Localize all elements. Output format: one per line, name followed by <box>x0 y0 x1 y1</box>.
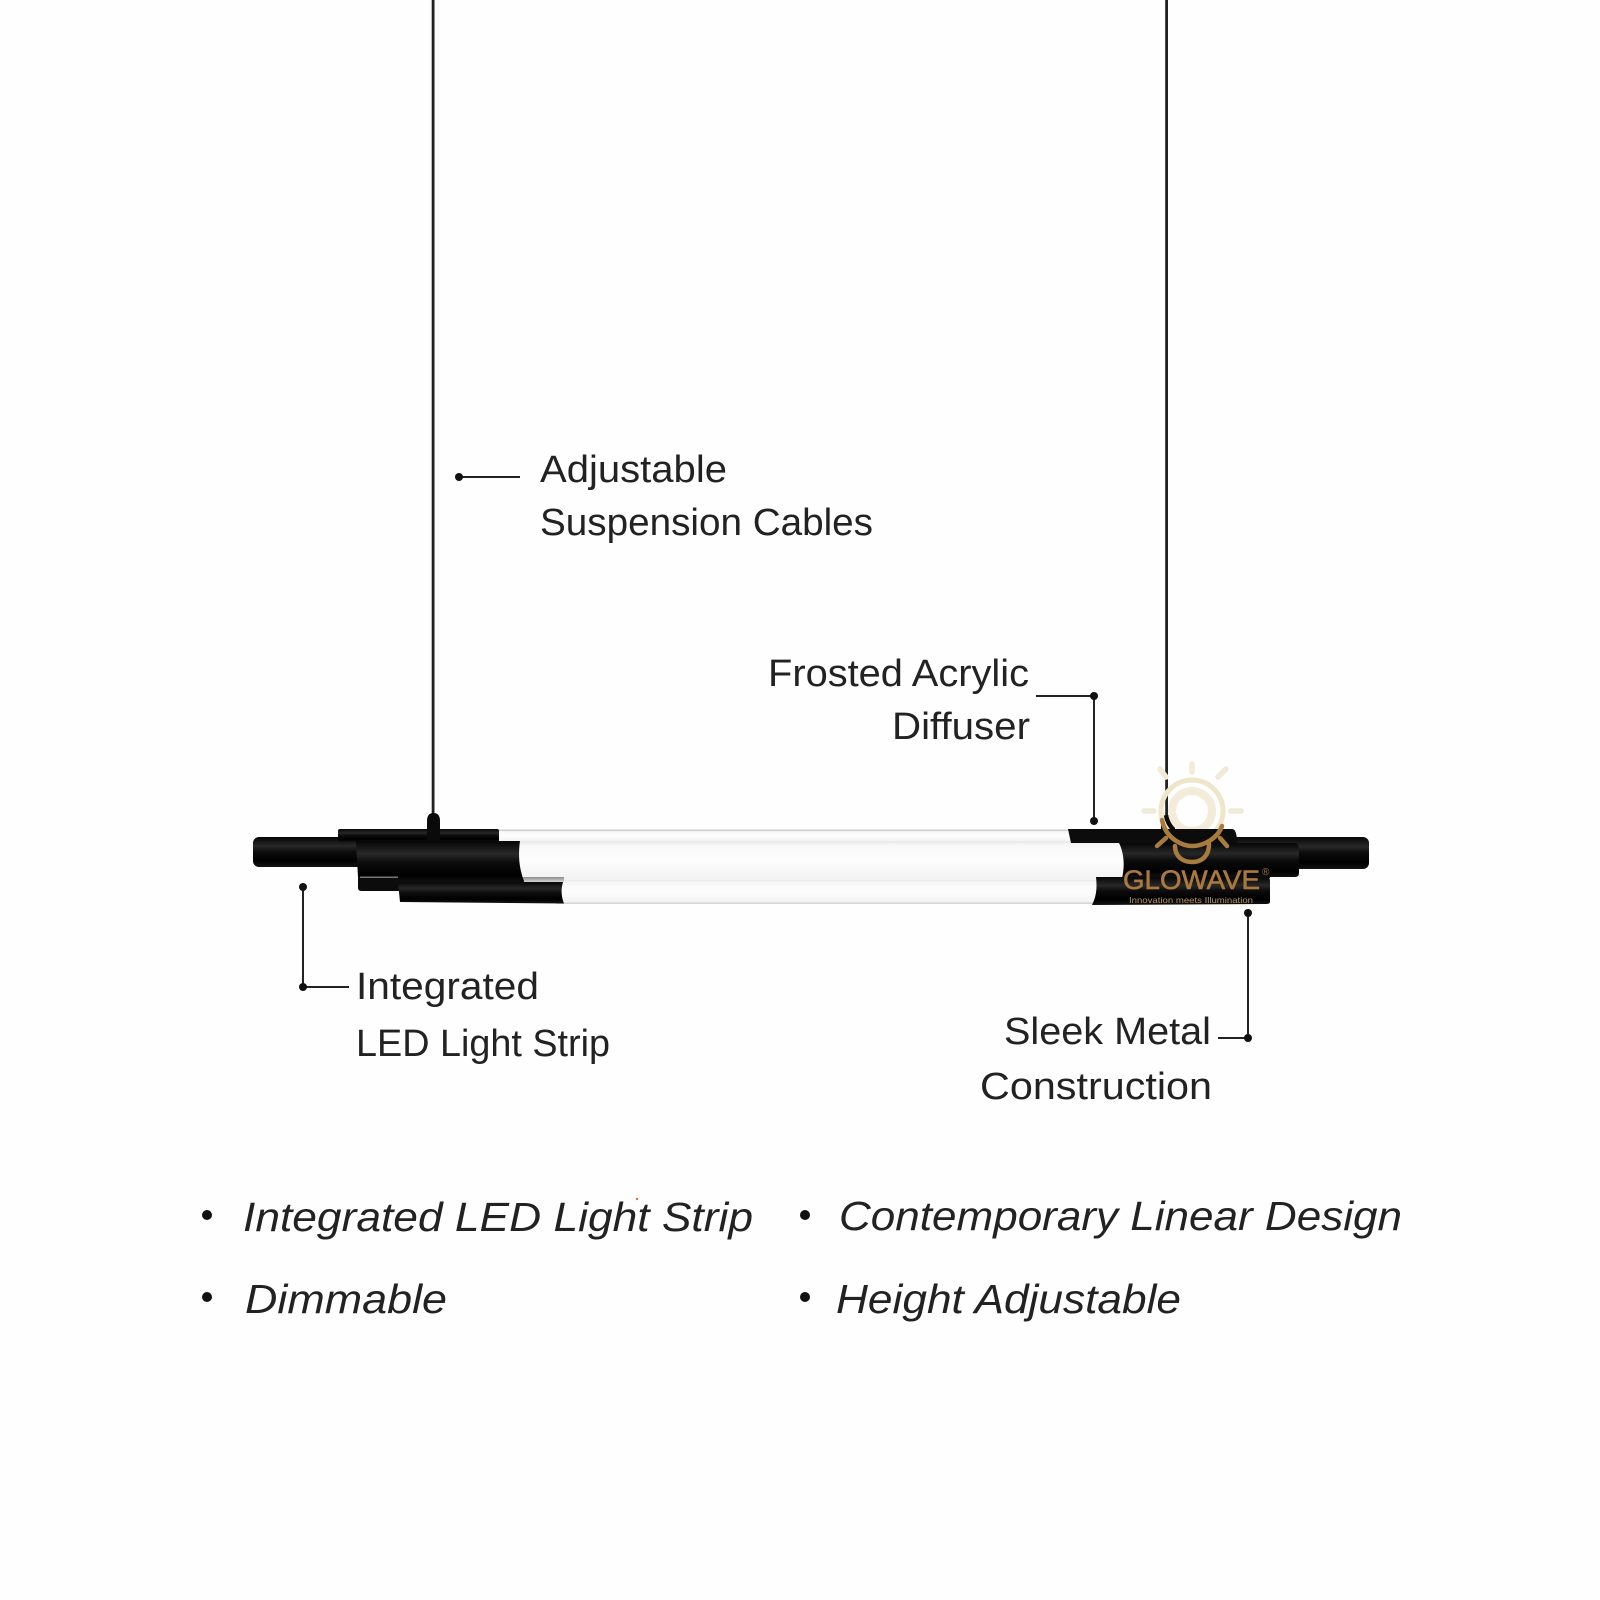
callout: integrated LED light strip <box>299 883 610 1065</box>
Glowave logo watermark <box>1123 764 1270 905</box>
callout: adjustable suspension cables <box>455 449 873 544</box>
callout: frosted acrylic diffuser <box>768 653 1098 825</box>
left suspension cable <box>432 0 434 816</box>
registered mark: ® <box>1262 867 1270 878</box>
label text: Diffuser <box>892 706 1030 748</box>
bullet: contemporary linear design: Contemporary Linear Design <box>839 1193 1402 1239</box>
leader line <box>299 883 349 991</box>
logo tagline: Innovation meets Illumination <box>1129 895 1253 905</box>
right end black tubes <box>1068 829 1369 905</box>
frosted diffuser tubes <box>495 830 1124 904</box>
leader line <box>455 473 520 481</box>
left end black tubes <box>253 829 564 904</box>
label text: Adjustable <box>540 449 727 491</box>
label text: Construction <box>980 1066 1212 1108</box>
label text: LED Light Strip <box>356 1023 610 1065</box>
infographic canvas <box>202 0 1400 1322</box>
label text: Frosted Acrylic <box>768 653 1029 695</box>
label text: Suspension Cables <box>540 502 873 544</box>
leader line <box>1036 692 1098 825</box>
bullet: integrated LED light strip: Integrated LED Light Strip <box>243 1194 753 1240</box>
right suspension cable <box>1165 0 1168 818</box>
callout: sleek metal construction <box>980 909 1252 1108</box>
linear pendant lamp <box>253 813 1369 905</box>
right cable cap <box>1161 815 1175 832</box>
logo wordmark: GLOWAVE <box>1123 865 1260 895</box>
bullet: height adjustable: Height Adjustable <box>836 1276 1181 1322</box>
feature bullet list <box>202 1193 1402 1322</box>
label text: Integrated <box>356 966 539 1008</box>
logo bulb icon <box>1144 764 1241 862</box>
label text: Sleek Metal <box>1004 1011 1211 1053</box>
left cable cap <box>427 813 440 840</box>
bullet: dimmable: Dimmable <box>245 1276 447 1322</box>
leader line <box>1218 909 1252 1042</box>
